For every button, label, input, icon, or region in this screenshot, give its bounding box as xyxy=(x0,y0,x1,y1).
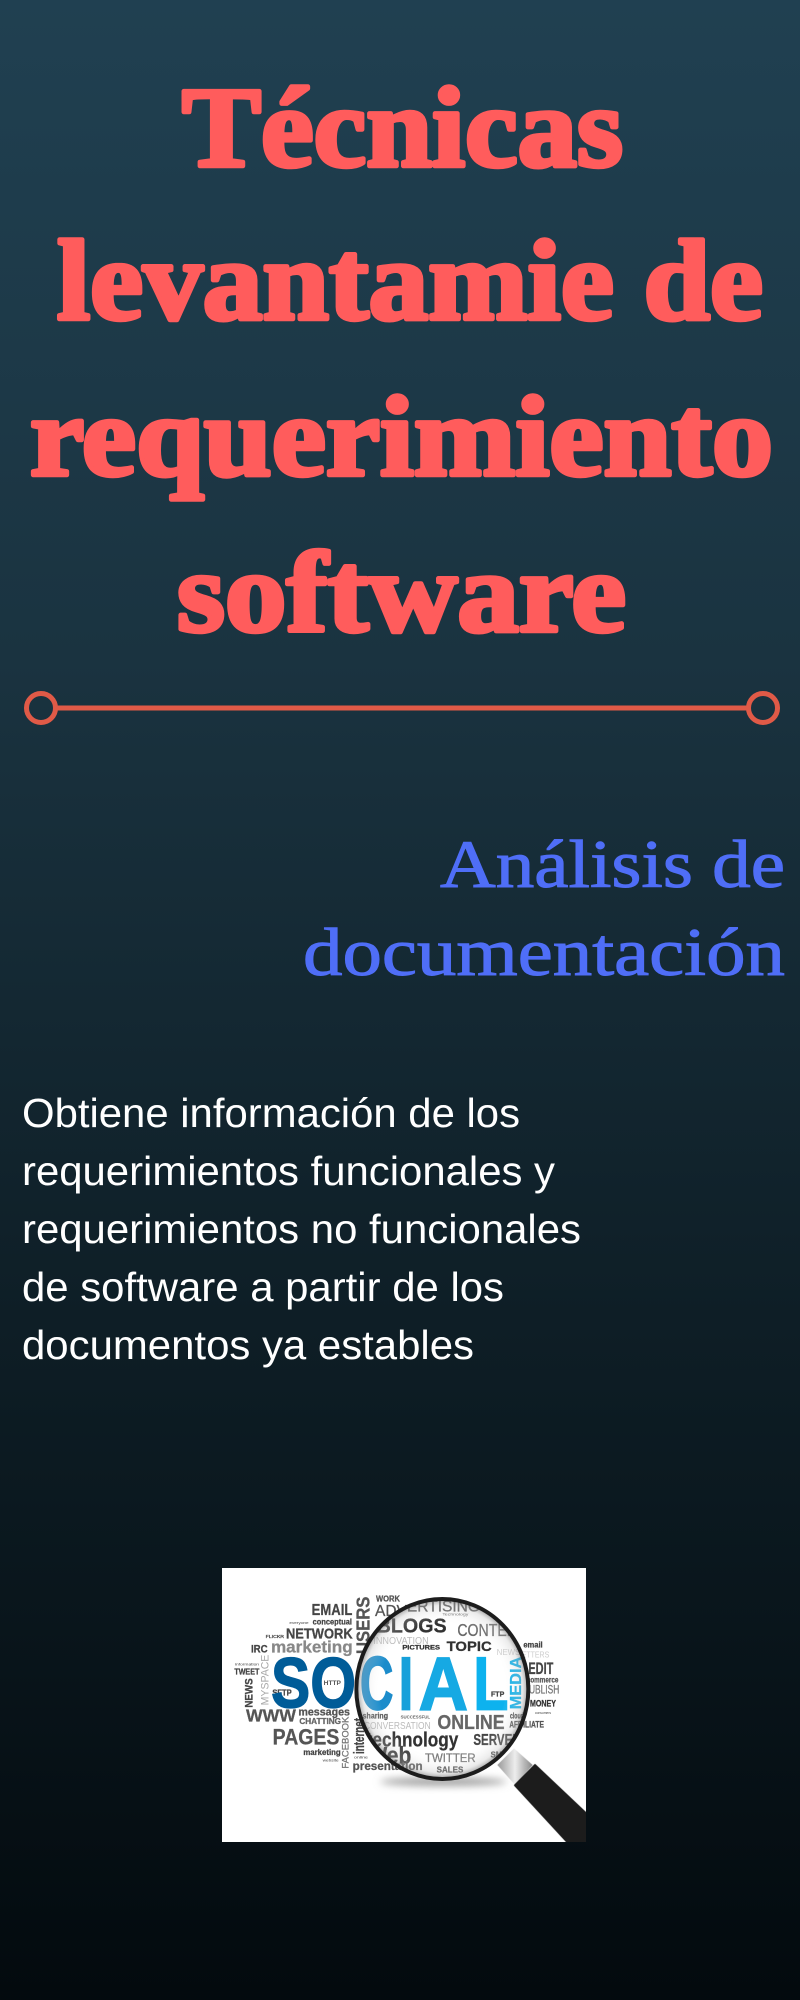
lens contents: Technology xyxy=(442,1612,468,1617)
title: software xyxy=(177,529,626,656)
word cloud outside lens: internet xyxy=(352,1718,368,1754)
word cloud outside lens: FACEBOOK xyxy=(340,1716,350,1769)
word cloud outside lens xyxy=(234,1595,559,1773)
word cloud outside lens: FLICKR xyxy=(266,1634,285,1639)
lens contents: CONTENT xyxy=(457,1620,526,1640)
word cloud outside lens: MYSPACE xyxy=(259,1655,271,1705)
lens contents: technology xyxy=(367,1729,459,1752)
big letters SO: SO xyxy=(271,1644,356,1724)
word cloud outside lens: MONEY xyxy=(530,1699,557,1709)
lens contents: ADVERTISING xyxy=(375,1599,480,1616)
lens contents: SUCCESSFUL xyxy=(401,1714,430,1719)
lens contents: SERVERS xyxy=(473,1732,529,1749)
lens contents: I xyxy=(399,1641,413,1725)
word cloud outside lens: CHATTING xyxy=(299,1717,341,1726)
lens contents: TOPIC xyxy=(447,1638,492,1654)
word cloud outside lens: website xyxy=(323,1759,339,1763)
word cloud outside lens: WORK xyxy=(376,1595,400,1604)
word cloud outside lens: marketing xyxy=(303,1748,341,1757)
lens contents: ONLINE xyxy=(437,1712,505,1734)
lens contents: L xyxy=(473,1641,508,1725)
title xyxy=(30,64,773,656)
title: levantamie de xyxy=(57,217,763,344)
lens contents: NEWSLE xyxy=(497,1648,530,1657)
body text: Obtiene información de los xyxy=(22,1090,520,1136)
body text: requerimientos funcionales y xyxy=(22,1148,556,1194)
body text: documentos ya estables xyxy=(22,1322,474,1368)
word cloud outside lens: conceptual xyxy=(313,1617,352,1626)
body text: requerimientos no funcionales xyxy=(22,1206,581,1252)
lens contents: PICTURES xyxy=(402,1644,441,1651)
word cloud outside lens: AFFILIATE xyxy=(510,1719,544,1729)
lens rim xyxy=(356,1599,528,1779)
metal neck of handle xyxy=(497,1748,533,1785)
word cloud outside lens: messages xyxy=(298,1707,350,1719)
lens contents: MEDIA xyxy=(508,1657,525,1709)
word cloud outside lens: information xyxy=(235,1662,259,1666)
lens contents: C xyxy=(360,1641,393,1725)
lens contents: sharing xyxy=(363,1710,388,1720)
title: Técnicas xyxy=(182,64,623,191)
word cloud outside lens: EMAIL xyxy=(312,1602,352,1619)
word cloud outside lens: PAGES xyxy=(273,1724,339,1749)
word cloud outside lens: presentation xyxy=(353,1759,423,1773)
lens contents: BLOGS xyxy=(377,1615,447,1638)
word cloud outside lens: consumers xyxy=(535,1711,551,1715)
word cloud outside lens: USERS xyxy=(352,1597,373,1654)
lens contents: SALES xyxy=(437,1765,464,1774)
title: requerimiento xyxy=(30,373,773,500)
lens contents xyxy=(353,1598,530,1780)
word cloud outside lens: WWW xyxy=(246,1706,296,1726)
shadow under lens xyxy=(380,1778,507,1786)
word cloud outside lens: everyone xyxy=(289,1621,309,1625)
word cloud outside lens: NEWS xyxy=(244,1678,256,1708)
lens contents: AFFILI xyxy=(509,1719,529,1729)
word cloud outside lens: EDIT xyxy=(528,1659,553,1678)
word cloud outside lens: ecommerce xyxy=(523,1675,559,1684)
word cloud outside lens: SFTP xyxy=(272,1689,292,1698)
black handle xyxy=(515,1765,586,1842)
subheading: documentación xyxy=(303,914,785,990)
word cloud outside lens: marketing xyxy=(271,1637,353,1656)
body text: de software a partir de los xyxy=(22,1264,504,1310)
lens contents: Web xyxy=(367,1742,411,1769)
word cloud outside lens: ADVERTISING xyxy=(375,1603,480,1620)
image: social media word cloud under magnifying glass xyxy=(222,1568,586,1842)
lens contents: CONVERSATION xyxy=(364,1721,431,1732)
word cloud outside lens: TWEET xyxy=(234,1668,259,1677)
image: social media word cloud under magnifying glass: HTTP xyxy=(324,1680,342,1687)
word cloud outside lens: NETWORK xyxy=(286,1626,353,1642)
lens contents: A xyxy=(419,1641,468,1725)
body text xyxy=(22,1090,581,1368)
lens contents: FTP xyxy=(491,1690,504,1699)
word cloud outside lens: IRC xyxy=(251,1643,268,1655)
lens contents: SMS xyxy=(491,1749,508,1759)
subheading: Análisis de xyxy=(440,826,785,902)
lens contents: INNOVATION xyxy=(373,1636,429,1647)
word cloud outside lens: NEWSLETTERS xyxy=(497,1650,549,1659)
word cloud outside lens: online xyxy=(354,1754,369,1759)
divider with end circles xyxy=(26,694,778,722)
word cloud outside lens: DIGG xyxy=(286,1668,296,1672)
subheading xyxy=(303,826,785,990)
lens contents: TWITTER xyxy=(425,1751,476,1765)
word cloud outside lens: email xyxy=(523,1641,543,1650)
lens contents: clouds xyxy=(510,1710,527,1720)
word cloud outside lens: PUBLISH xyxy=(523,1682,559,1696)
lens contents: presentation xyxy=(353,1759,423,1773)
